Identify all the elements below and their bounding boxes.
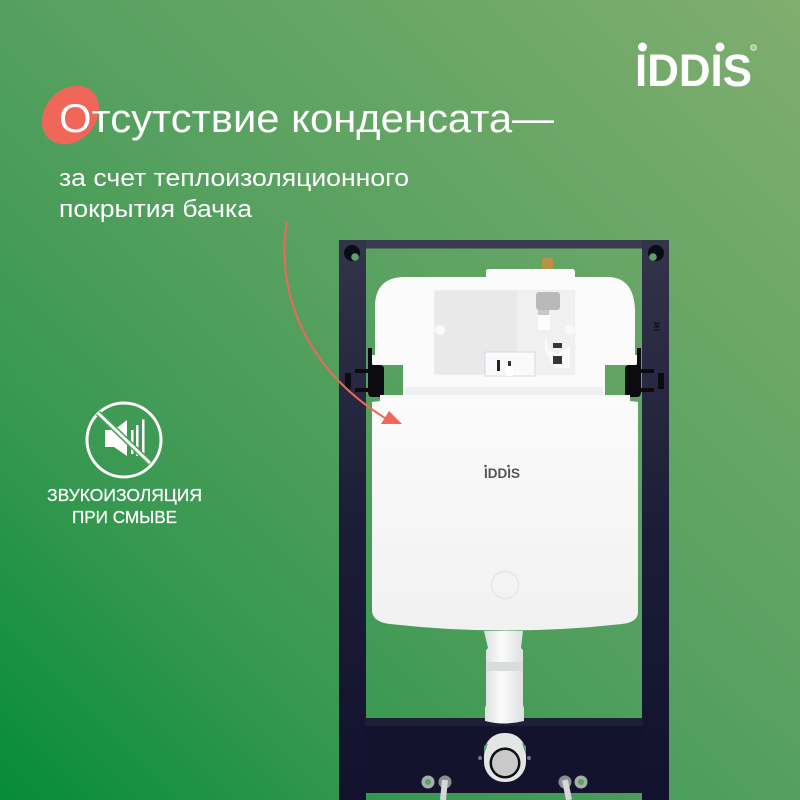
clip right (625, 348, 664, 397)
mounting hole left (344, 245, 360, 261)
heading (30, 74, 554, 156)
box gussets (435, 325, 445, 335)
arrow: callout to tank (285, 222, 402, 424)
left post (339, 240, 366, 800)
housing lower seam (405, 387, 603, 396)
frame symbol (654, 323, 660, 330)
caption: sound insulation (47, 485, 202, 527)
cistern upper housing (372, 269, 637, 396)
subheading text: покрытия бачка (59, 196, 253, 223)
brass inlet fitting (542, 258, 553, 270)
subheading text: за счет теплоизоляционного (59, 165, 409, 192)
clip left (345, 348, 384, 397)
button bracket (485, 352, 535, 376)
caption: sound insulation: ЗВУКОИЗОЛЯЦИЯ (47, 485, 202, 505)
heading text: Отсутствие конденсата— (59, 97, 554, 141)
frame top bar (365, 240, 643, 248)
logo: iddis: IDDIS (635, 45, 752, 96)
flush pipe (484, 631, 524, 724)
float valve (536, 292, 560, 310)
lower crossbar (365, 718, 643, 793)
water connection right (558, 776, 588, 800)
icon: muted sound (87, 403, 161, 477)
heading accent blob (30, 74, 111, 156)
service box (434, 290, 575, 376)
mounting hole right (648, 245, 664, 261)
subheading text (59, 165, 409, 223)
tank logo: IDDIS (484, 465, 520, 481)
installation frame (339, 240, 669, 800)
right post (642, 240, 669, 800)
water connection left (422, 776, 452, 800)
embossed circle (492, 572, 518, 598)
caption: sound insulation: ПРИ СМЫВЕ (72, 507, 177, 527)
flush connection (478, 733, 531, 782)
cistern lower body (372, 395, 638, 630)
